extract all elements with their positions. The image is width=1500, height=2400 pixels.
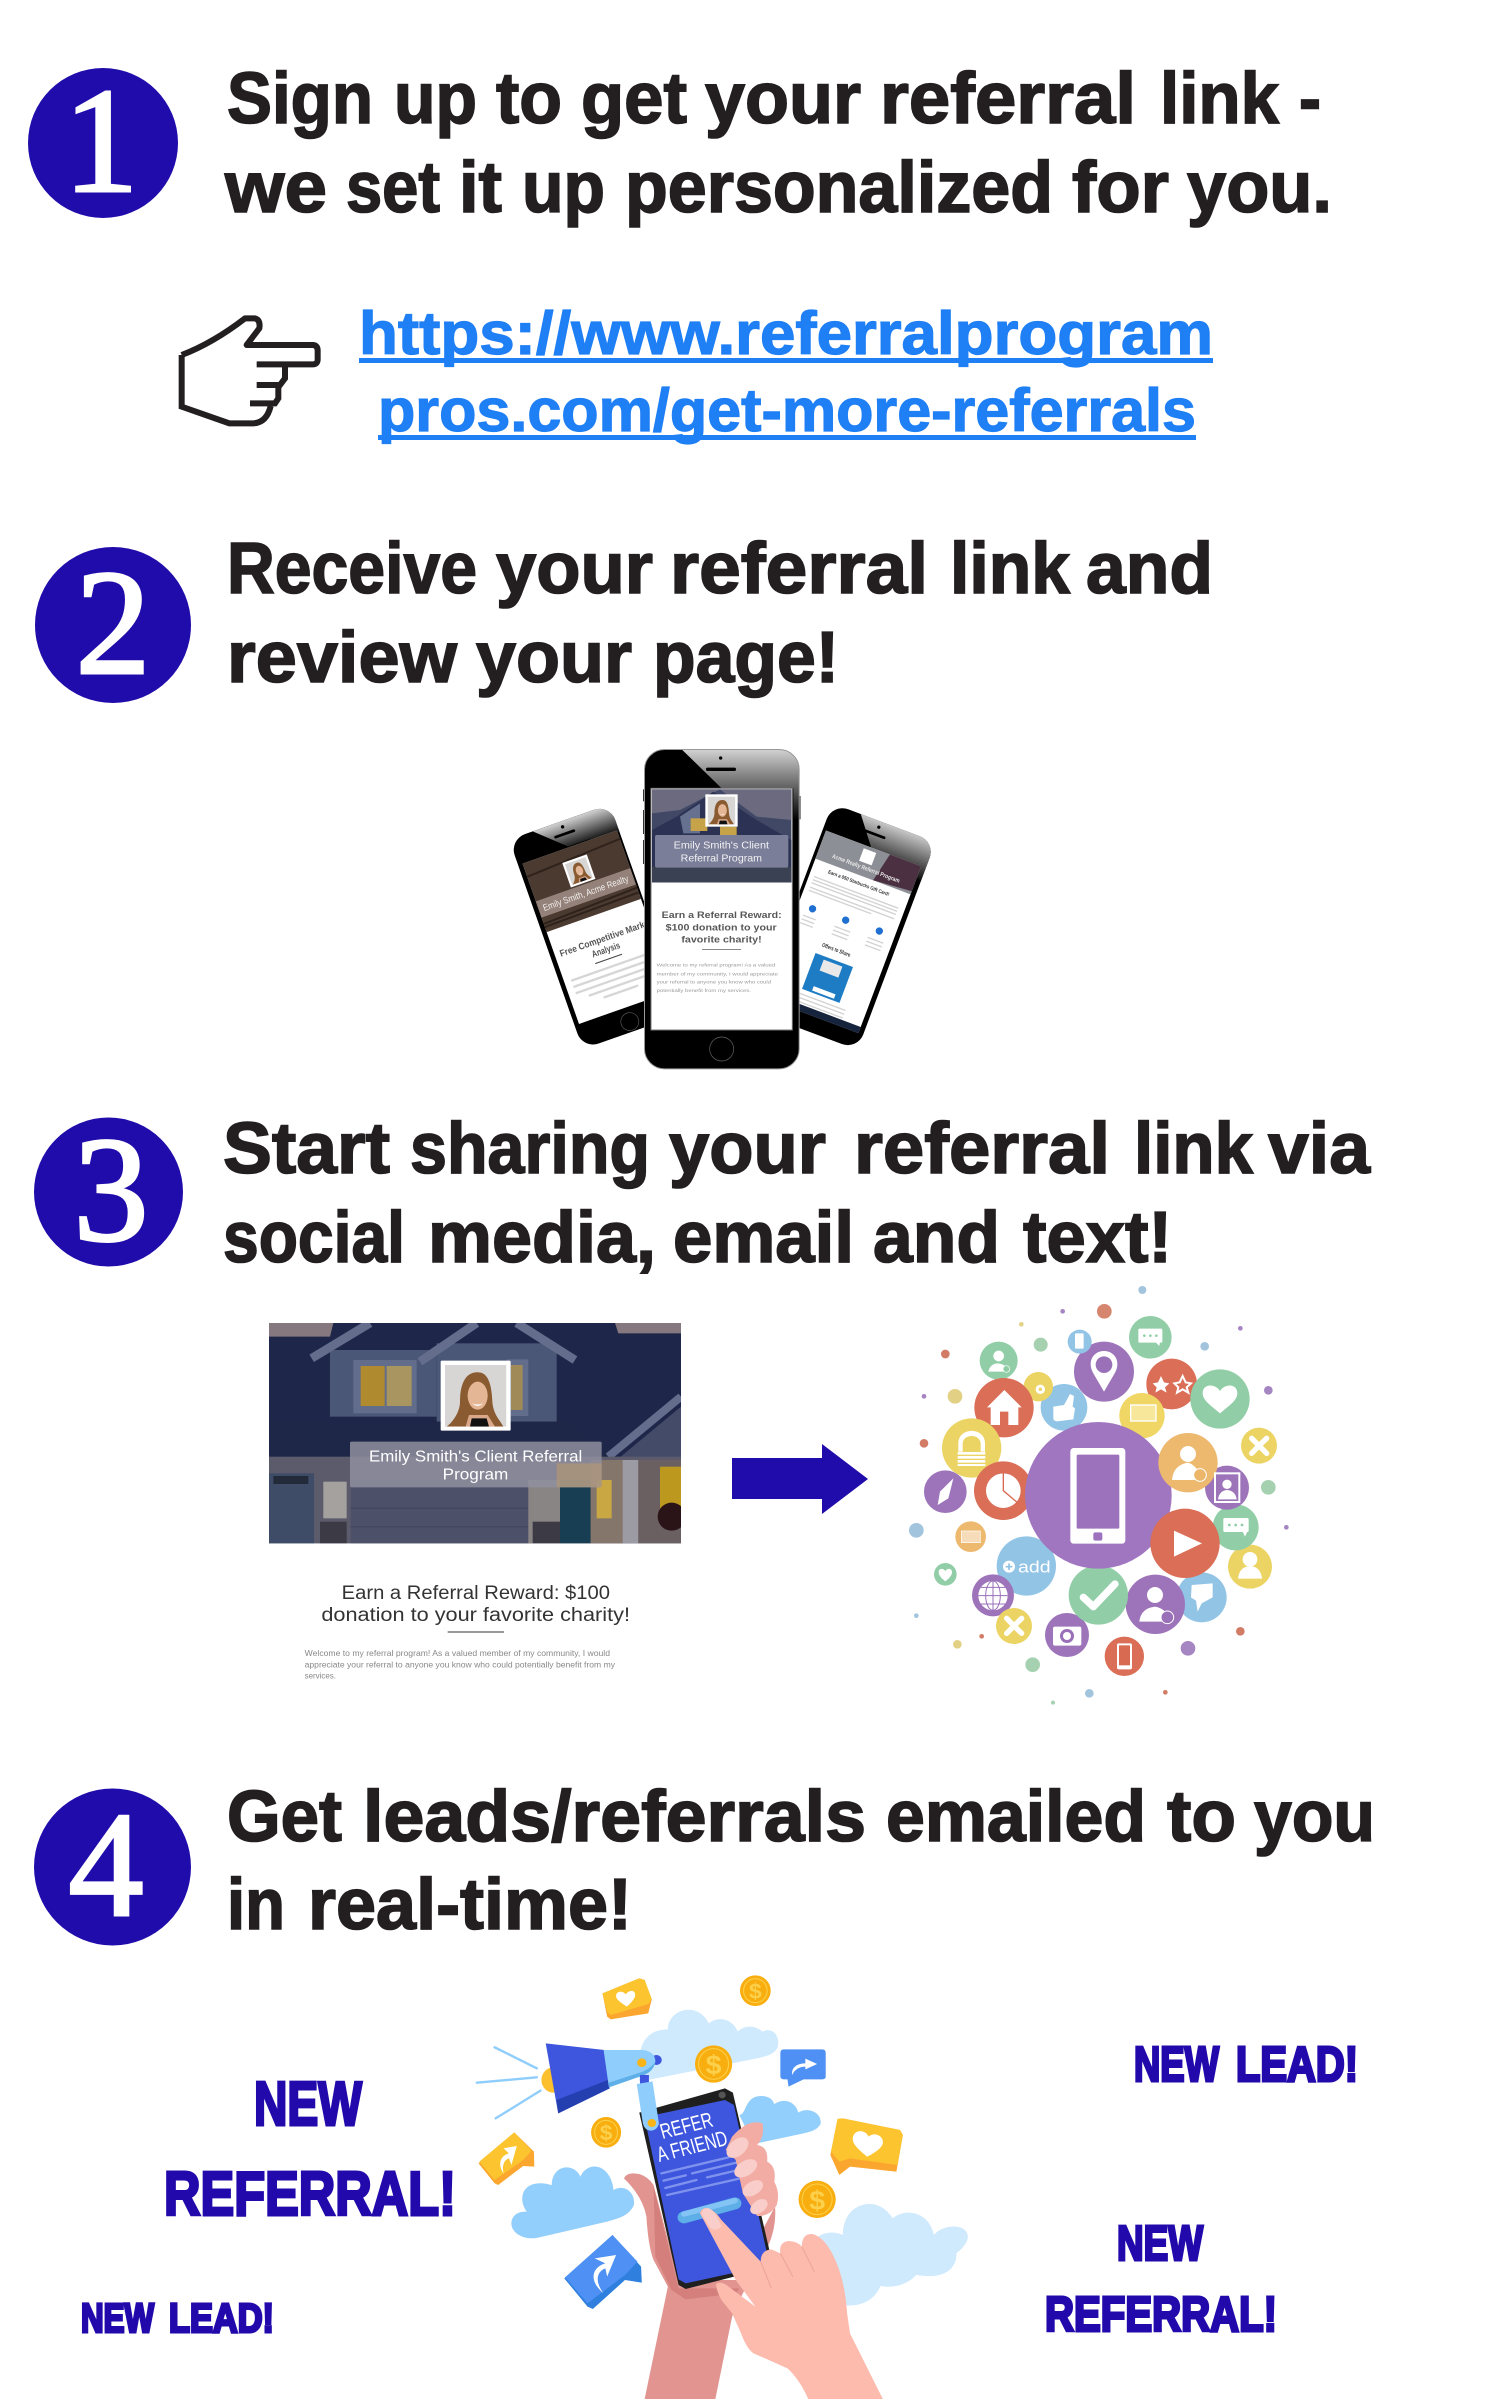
step 1 heading: set: [346, 148, 440, 228]
step 1 heading: we: [224, 148, 327, 228]
center phone: potentially benefit from my services.: [657, 988, 751, 994]
arrow: [732, 1444, 868, 1514]
callout: new lead, right: LEAD!: [1236, 2038, 1358, 2092]
coins: $: [600, 2121, 612, 2145]
step 2 heading: review: [227, 618, 458, 698]
step 4 heading: real-time!: [308, 1865, 632, 1945]
step 2 heading: page!: [653, 618, 839, 698]
social media icon cluster: [909, 1286, 1289, 1705]
callout: new lead, left: NEW: [81, 2295, 154, 2341]
coins: $: [749, 1979, 762, 2003]
center phone: [643, 749, 801, 1069]
step 2 heading: and: [1086, 529, 1213, 609]
center phone: Welcome to my referral program! As a valued: [657, 963, 776, 969]
welcome text: appreciate your referral to anyone you know who could potentially benefit from my: [305, 1660, 615, 1669]
step 3 heading: media,: [428, 1198, 656, 1278]
left phone: Free Competitive Market: [558, 917, 653, 959]
step 1 heading: you.: [1187, 148, 1332, 228]
step 4 heading: [227, 1777, 1375, 1945]
share bubbles: [479, 2049, 826, 2309]
welcome text: services.: [305, 1672, 336, 1681]
step 3 heading: via: [1268, 1109, 1371, 1189]
step 3 heading: email: [673, 1198, 854, 1278]
step 3 heading: text!: [1023, 1198, 1172, 1278]
reward heading: Earn a Referral Reward: $100: [342, 1583, 610, 1604]
callout: new referral, left: [164, 2070, 456, 2229]
callout: new referral, left: NEW: [254, 2070, 362, 2139]
heart bubbles: [602, 1978, 903, 2175]
center phone: your referral to anyone you know who could: [657, 980, 771, 986]
left phone: [514, 808, 644, 1044]
coloured discs: [924, 1316, 1277, 1676]
step 1 heading: referral: [880, 59, 1136, 139]
step 1 heading: it: [459, 148, 502, 228]
step 3 heading: link: [1134, 1109, 1254, 1189]
step 3 heading: [223, 1109, 1371, 1278]
step 3 number badge: 3: [74, 1107, 148, 1273]
scattered dots: [909, 1286, 1289, 1705]
megaphone: [477, 2043, 662, 2131]
step 2 heading: link: [950, 529, 1071, 609]
step 1 heading: get: [581, 59, 687, 139]
step 3 number badge: [34, 1107, 183, 1273]
step 1 heading: [224, 59, 1332, 228]
step 1 heading: link: [1160, 59, 1280, 139]
step 4 heading: leads/referrals: [363, 1777, 866, 1857]
step 2 heading: referral: [670, 529, 928, 609]
coins: [591, 1975, 836, 2218]
step 1 number badge: 1: [64, 58, 138, 224]
welcome text: [305, 1649, 615, 1681]
callout: new referral, left: REFERRAL!: [164, 2160, 456, 2229]
portrait: [441, 1361, 511, 1431]
back hand: [624, 2173, 775, 2399]
step 1 heading: personalized: [625, 148, 1053, 228]
three phone mockups: [509, 749, 947, 1069]
icon: pointing hand: [182, 318, 318, 423]
step 4 heading: emailed: [886, 1777, 1146, 1857]
reward heading: [321, 1583, 630, 1633]
white icons: [938, 1329, 1267, 1669]
center phone: $100 donation to your: [666, 922, 777, 932]
right phone: Earn a $50 Starbucks Gift Card!: [827, 869, 890, 898]
step 2 heading: your: [476, 618, 632, 698]
holding fingers: [722, 2122, 778, 2217]
white icons: add: [1018, 1558, 1051, 1577]
step 2 number badge: 2: [76, 540, 150, 706]
step 1 heading: to: [496, 59, 562, 139]
callout: new referral, right: [1045, 2217, 1277, 2342]
step 4 heading: in: [227, 1865, 285, 1945]
step 2 number badge: [35, 540, 191, 706]
step 2 heading: your: [496, 529, 653, 609]
step 1 heading: your: [705, 59, 861, 139]
center phone: favorite charity!: [681, 935, 762, 945]
refer a friend illustration: [477, 1975, 968, 2399]
welcome text: Welcome to my referral program! As a valued member of my community, I would: [305, 1649, 610, 1658]
step 3 heading: sharing: [410, 1109, 650, 1189]
step 3 heading: your: [669, 1109, 826, 1189]
referral page preview: [269, 1323, 686, 1681]
center phone: Earn a Referral Reward:: [662, 910, 782, 920]
step 1 heading: for: [1072, 148, 1169, 228]
callout: new lead, right: [1134, 2038, 1358, 2092]
center phone: member of my community, I would appreciate: [657, 971, 778, 977]
step 4 heading: you: [1254, 1777, 1375, 1857]
callout: new lead, right: NEW: [1134, 2038, 1220, 2092]
step 4 number badge: 4: [68, 1782, 144, 1948]
left phone: Emily Smith, Acme Realty: [542, 874, 630, 913]
step 4 heading: to: [1167, 1777, 1236, 1857]
callout: new lead, left: [81, 2295, 274, 2341]
coins: $: [809, 2185, 825, 2215]
right phone: [800, 808, 931, 1046]
reward heading: donation to your favorite charity!: [321, 1605, 630, 1626]
icon accents: [1143, 1334, 1243, 1526]
center phone: Referral Program: [681, 853, 762, 864]
step 3 heading: Start: [223, 1109, 390, 1189]
step 4 number badge: [34, 1782, 191, 1948]
house photo: [269, 1323, 686, 1543]
center phone: Emily Smith's Client: [674, 840, 769, 851]
step 2 heading: Receive: [227, 529, 477, 609]
right phone: Acme Realty Referral Program: [831, 854, 900, 885]
right phone: Offers to Share: [821, 943, 851, 959]
phone: REFER: [657, 2107, 716, 2144]
step 4 heading: Get: [227, 1777, 342, 1857]
step 1 heading: -: [1299, 59, 1321, 139]
front hand: [700, 2208, 883, 2399]
title banner: [350, 1442, 602, 1487]
clouds: [511, 2010, 968, 2305]
step 3 heading: referral: [854, 1109, 1110, 1189]
callout: new referral, right: REFERRAL!: [1045, 2288, 1277, 2342]
phone: A FRIEND: [654, 2126, 730, 2167]
referral link: [359, 300, 1213, 444]
title banner: Emily Smith's Client Referral: [369, 1448, 582, 1465]
left phone: Analysis: [590, 940, 621, 959]
step 1 heading: up: [522, 148, 605, 228]
step 1 number badge: [28, 58, 178, 224]
step 3 heading: social: [223, 1198, 405, 1278]
referral link: https://www.referralprogram: [359, 300, 1213, 367]
referral link: pros.com/get-more-referrals: [378, 377, 1196, 444]
step 3 heading: and: [873, 1198, 1000, 1278]
coins: $: [706, 2050, 722, 2080]
step 2 heading: [227, 529, 1213, 698]
callout: new referral, right: NEW: [1117, 2217, 1204, 2271]
step 1 heading: up: [394, 59, 477, 139]
step 1 heading: Sign: [227, 59, 373, 139]
callout: new lead, left: LEAD!: [169, 2295, 274, 2341]
phone: [639, 2088, 773, 2289]
title banner: Program: [443, 1466, 508, 1483]
